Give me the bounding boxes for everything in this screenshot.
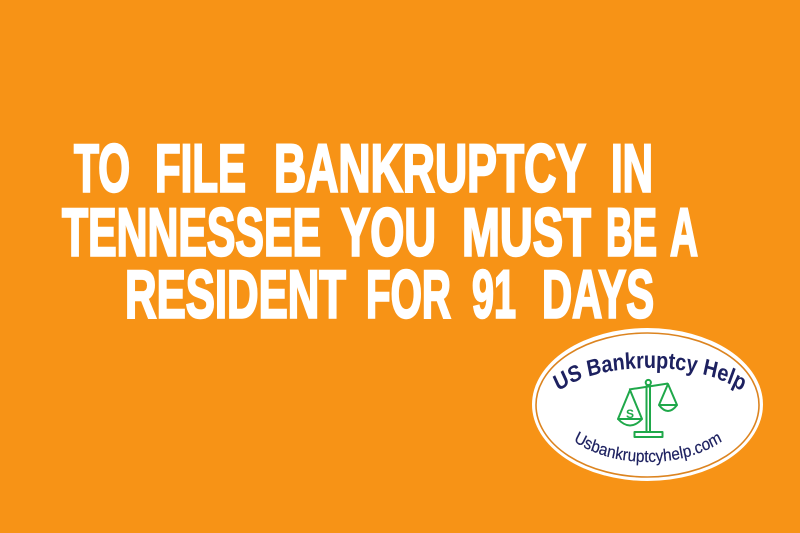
heading: BE	[606, 194, 657, 270]
badge oval	[532, 328, 763, 481]
dollar mark on scale: S	[626, 407, 634, 421]
heading	[62, 130, 698, 332]
heading: IN	[611, 130, 653, 206]
heading: RESIDENT	[125, 256, 346, 332]
heading: TO	[74, 130, 130, 206]
icon: balance scale	[618, 380, 677, 437]
heading: A	[670, 194, 698, 270]
heading: TENNESSEE	[62, 194, 321, 270]
heading: YOU	[341, 194, 436, 270]
heading: FOR	[366, 256, 451, 332]
heading: BANKRUPTCY	[274, 130, 586, 206]
heading: DAYS	[542, 256, 654, 332]
heading: FILE	[155, 130, 246, 206]
logo badge	[532, 328, 763, 481]
badge website: Usbankruptcyhelp.com	[576, 431, 722, 466]
heading: MUST	[462, 194, 591, 270]
badge title: US Bankruptcy Help	[552, 352, 745, 392]
heading: 91	[472, 256, 516, 332]
badge orange ring	[536, 333, 759, 477]
